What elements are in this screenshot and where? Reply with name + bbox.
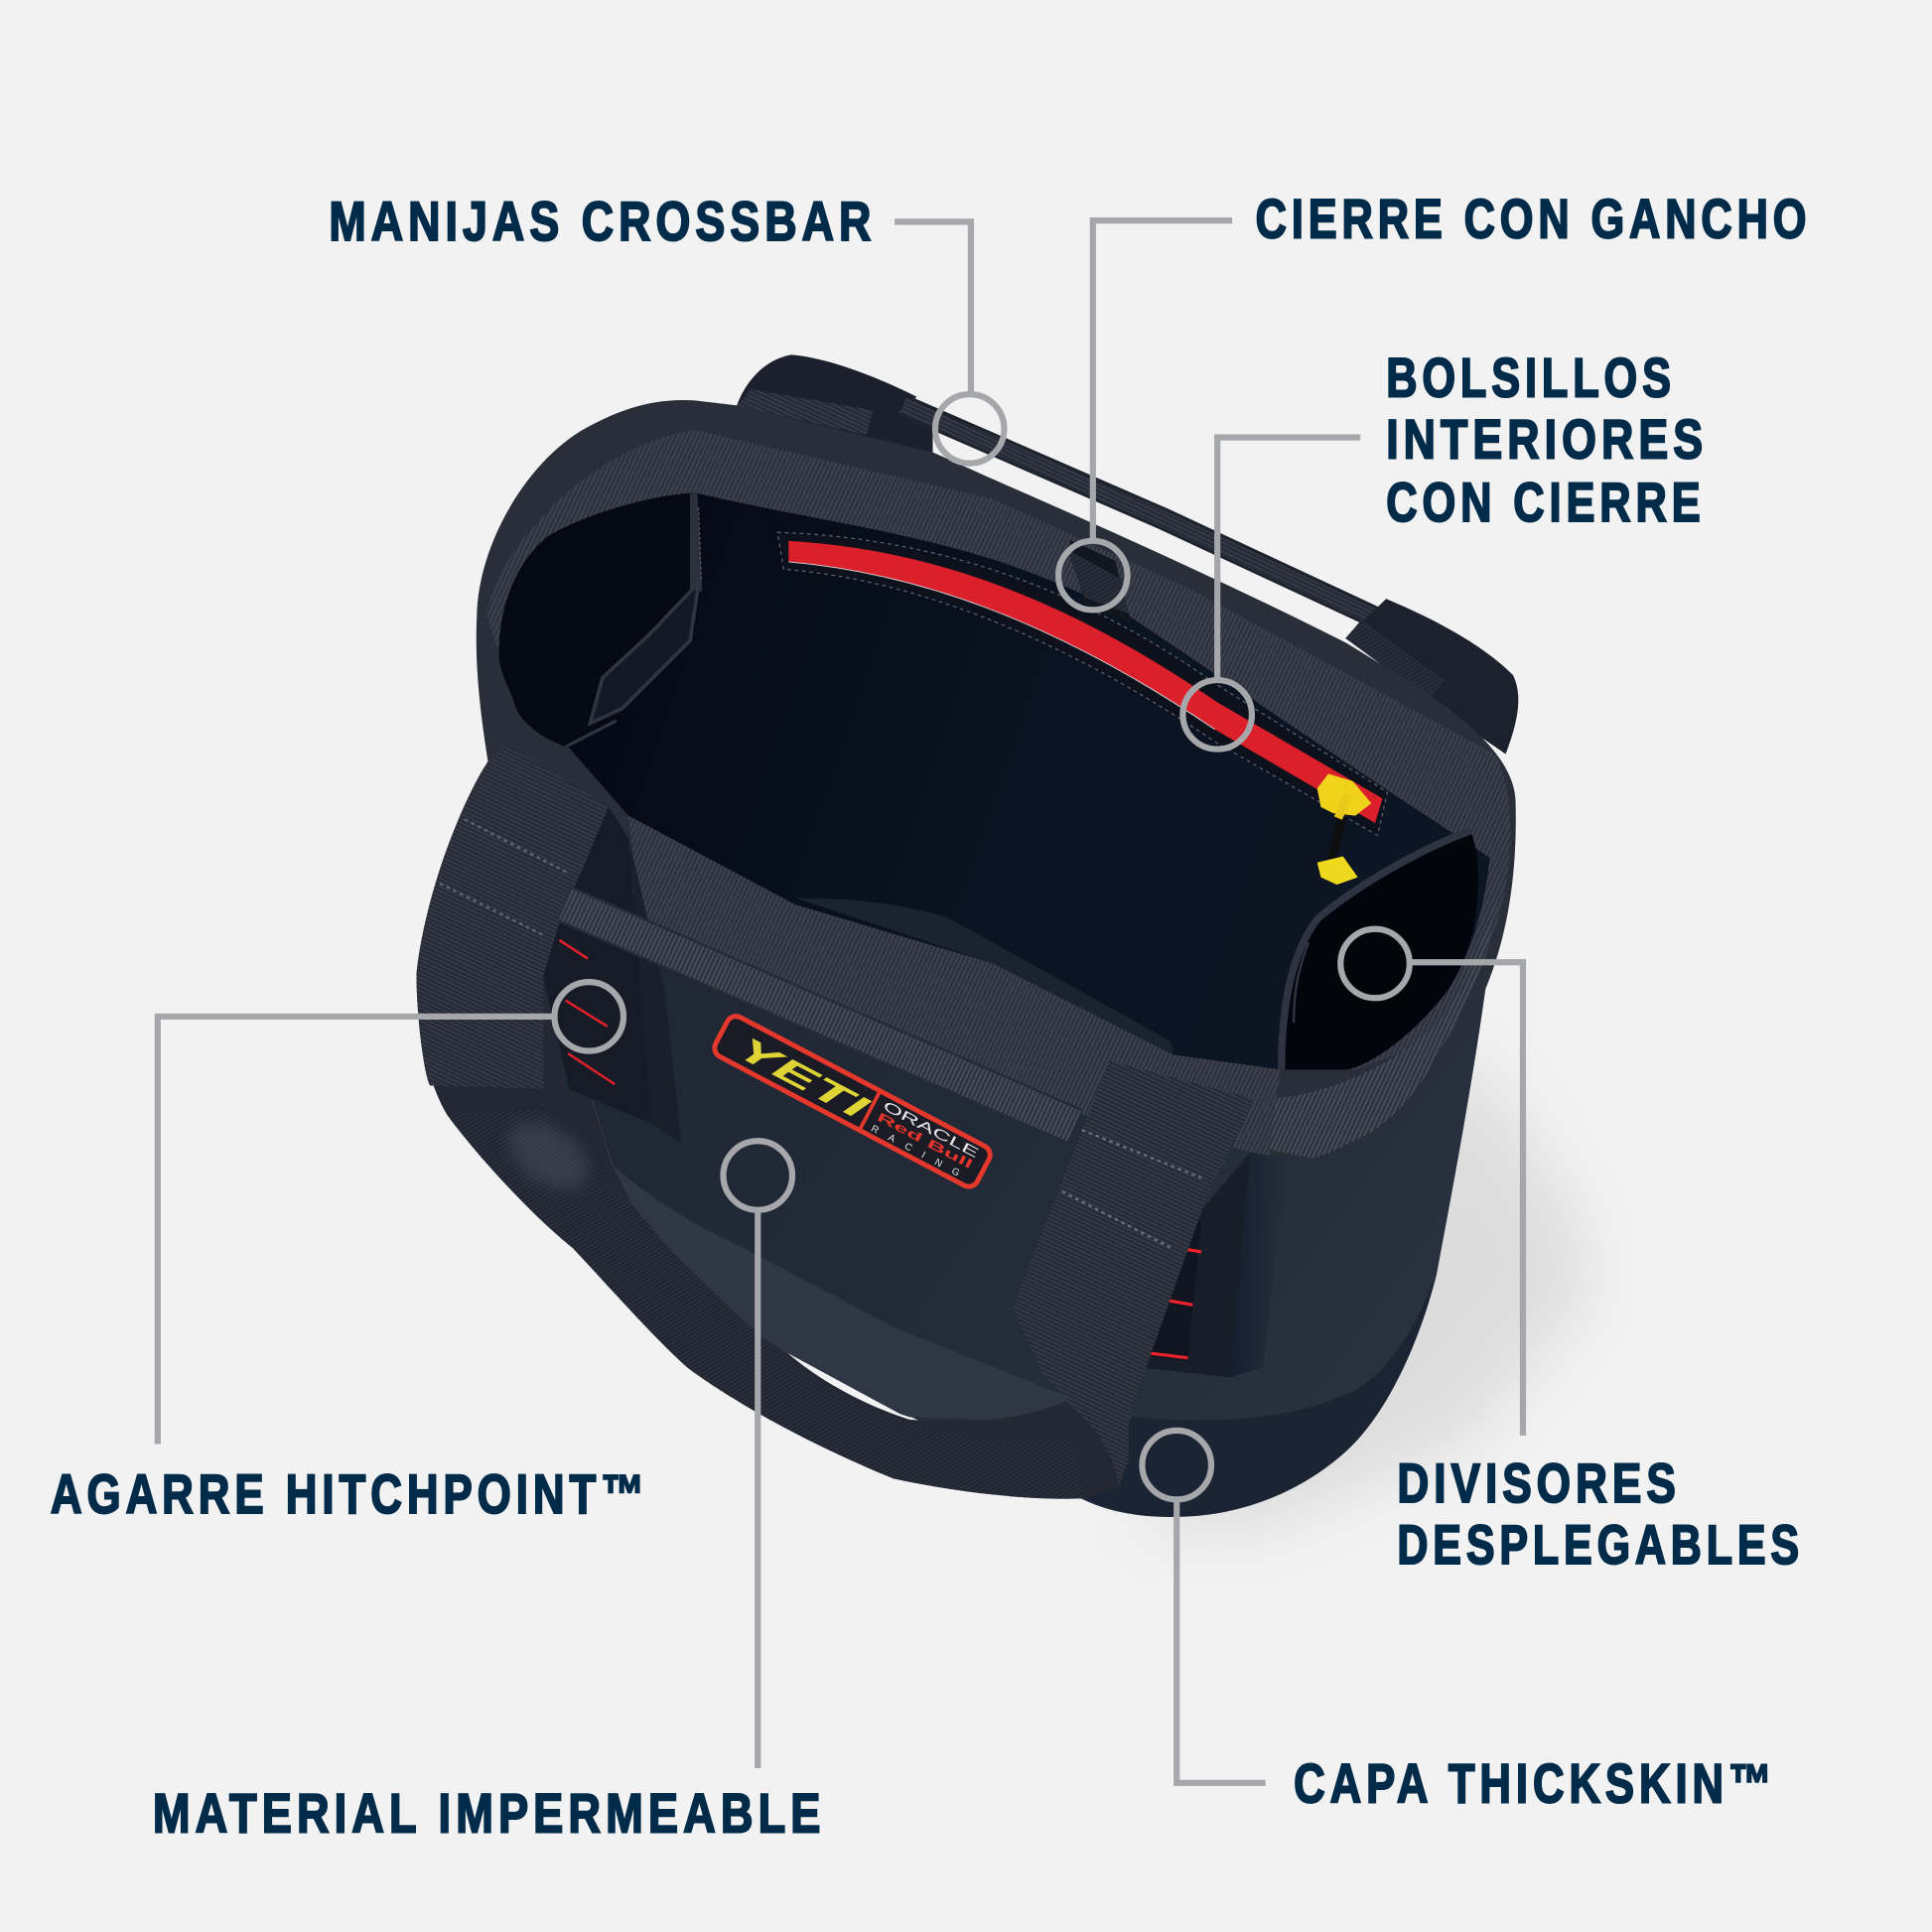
front crossbar handle: [566, 904, 1074, 1126]
callout: bolsillos interiores con cierre: [1182, 347, 1708, 750]
callout: manijas crossbar: [329, 191, 1004, 464]
front interior lip: [796, 898, 1173, 1054]
rear handle: [737, 354, 1518, 755]
panel shadow strip: [1230, 1152, 1288, 1378]
YETI patch: Red Bull: [875, 1110, 975, 1172]
hook closure tab: [1067, 540, 1131, 622]
lower front panel: [613, 1165, 1140, 1423]
woven highlight on handle: [496, 1108, 601, 1203]
outer band front right: [1264, 905, 1493, 1159]
callout: capa thickskin: CAPA THICKSKIN™: [1294, 1753, 1777, 1815]
thick base: [1072, 1274, 1437, 1517]
left strap and carry handle: [416, 745, 1119, 1499]
zipper pull: [1317, 773, 1371, 816]
callout: bolsillos interiores con cierre: INTERIORES: [1386, 409, 1708, 471]
team logo text: ORACLE: [881, 1098, 981, 1161]
callout: cierre con gancho: [1058, 189, 1811, 610]
right divider: [1282, 830, 1478, 1069]
left divider: [566, 492, 702, 747]
callout: manijas crossbar: MANIJAS CROSSBAR: [329, 191, 876, 252]
callout: bolsillos interiores con cierre: BOLSILLOS: [1386, 347, 1676, 409]
callout: bolsillos interiores con cierre: CON CIERRE: [1386, 472, 1706, 533]
YETI patch: [711, 1013, 994, 1190]
floor shadow: [1134, 1047, 1589, 1528]
YETI patch: RACING: [869, 1124, 968, 1182]
bag body: [542, 863, 1486, 1517]
callout: material impermeable: MATERIAL IMPERMEABLE: [153, 1782, 826, 1844]
front rim webbing: [628, 816, 1280, 1156]
right strap: [1013, 1061, 1254, 1486]
callout: agarre hitchpoint: [51, 982, 649, 1525]
callout: capa thickskin: [1142, 1431, 1777, 1815]
bag illustration: [416, 354, 1589, 1528]
right panel with red slots: [1144, 1152, 1251, 1378]
callout: agarre hitchpoint: AGARRE HITCHPOINT™: [51, 1463, 649, 1525]
left wall: [499, 492, 695, 748]
callout: material impermeable: [153, 1141, 826, 1844]
callout: divisores desplegables: DESPLEGABLES: [1397, 1514, 1804, 1576]
zipper pocket: [777, 532, 1387, 885]
YETI logo text: YETI: [724, 1034, 883, 1123]
rim: [477, 400, 1516, 1159]
back-lit sliver between handle and base: [783, 1351, 909, 1422]
interior of the bag: [499, 492, 1489, 1069]
loop panel with red slots: [543, 807, 681, 1144]
callout: divisores desplegables: DIVISORES: [1397, 1452, 1681, 1514]
callout: divisores desplegables: [1340, 929, 1804, 1576]
